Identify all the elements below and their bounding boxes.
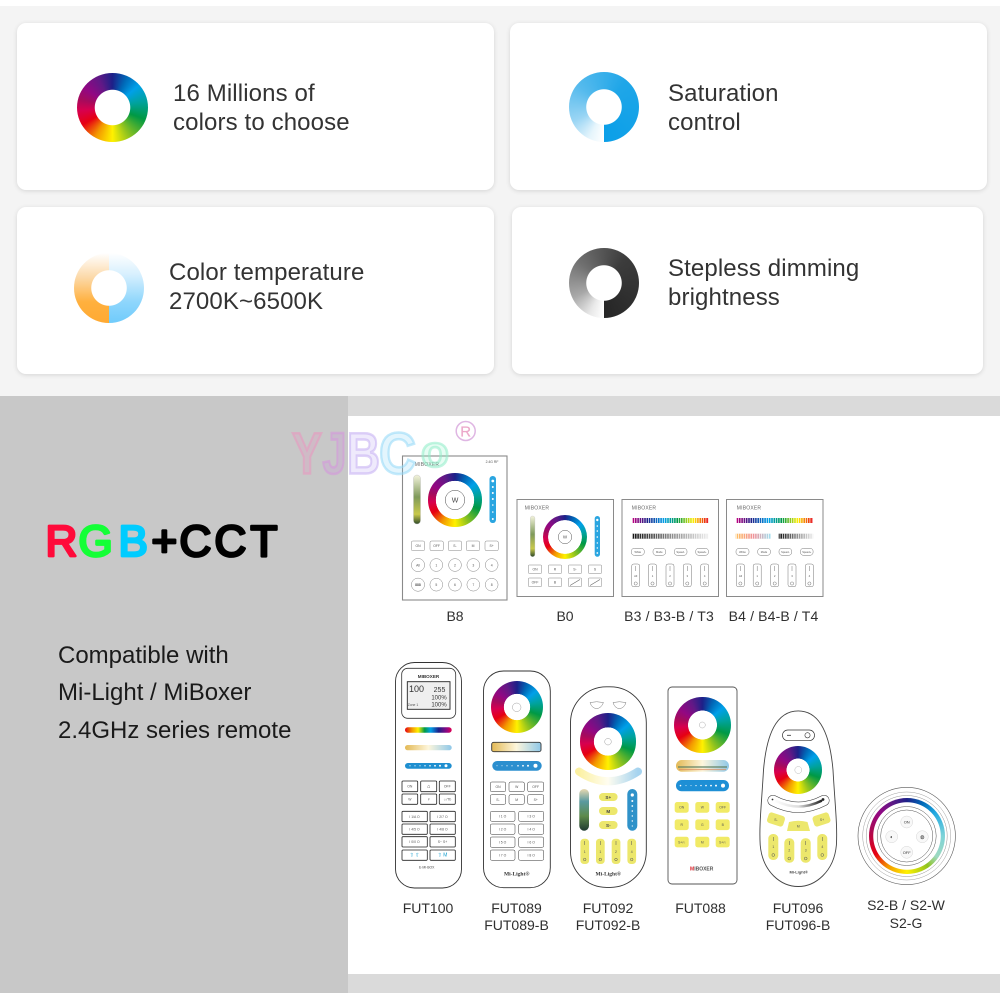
remote: FUT089 xyxy=(484,671,550,888)
remote: S2 round: OFF xyxy=(903,850,911,855)
page background top xyxy=(0,6,1000,396)
panel remote: B0: B xyxy=(554,580,557,584)
panel remote: B4 xyxy=(726,500,823,596)
watermark: YJBCo: Y xyxy=(292,422,322,487)
panel remote: B4: White xyxy=(739,550,746,554)
panel remote: B0: S- xyxy=(573,567,577,571)
remote: FUT089: I 1 O xyxy=(499,814,507,818)
watermark: YJBCo: o xyxy=(421,428,449,476)
panel remote: B0: ON xyxy=(532,567,538,571)
remote: FUT092: 4 xyxy=(631,850,633,854)
remote: FUT100: I 1/A O xyxy=(409,815,420,819)
panel remote: B3 xyxy=(622,500,718,596)
remote: FUT100: E·MI·BOX xyxy=(419,866,435,870)
remote: FUT092: 1 xyxy=(584,850,586,854)
label: wall panel names: B3 / B3-B / T3 xyxy=(624,608,714,624)
panel remote: B4: 3 xyxy=(791,574,793,578)
remote: FUT100: 255 xyxy=(434,687,445,694)
panel: saturation xyxy=(510,23,987,190)
remote: FUT088: W xyxy=(701,806,705,810)
panel remote: B8: S- xyxy=(453,544,457,548)
label: wall panel names xyxy=(446,608,818,624)
remote: FUT089: ON xyxy=(495,785,501,789)
text: color temperature: 2700K~6500K xyxy=(169,288,323,315)
remote: FUT088: S+/○ xyxy=(678,840,685,844)
panel remote: B0 xyxy=(517,500,614,596)
remote: FUT100: 100% xyxy=(431,702,447,708)
panel remote: B8: 3 xyxy=(472,563,474,567)
panel remote: B8: ON xyxy=(415,544,421,548)
remote: FUT088: S+/○ xyxy=(719,840,726,844)
text: compatibility xyxy=(58,642,291,744)
remote: FUT089: I 5 O xyxy=(499,840,507,844)
label: FUT092 xyxy=(576,900,640,933)
panel remote: B8: M xyxy=(472,544,475,548)
remote: FUT089: I 8 O xyxy=(528,853,535,857)
label: wall panel names: B0 xyxy=(556,608,574,624)
label: FUT096 xyxy=(766,900,830,933)
panel remote: B4: MIBOXER xyxy=(737,506,761,512)
panel: right band background xyxy=(348,396,1000,993)
remote: FUT100: MIBOXER xyxy=(418,674,440,679)
remote: S2 round: ◍ xyxy=(920,834,925,840)
remote: FUT089: W xyxy=(515,785,519,789)
remote: FUT088: OFF xyxy=(719,806,726,810)
remote: FUT096: Mi-Light® xyxy=(789,870,808,874)
panel remote: B8: 6 xyxy=(454,583,456,587)
icon: saturation ring xyxy=(569,72,639,142)
label: FUT089: FUT089 xyxy=(491,900,542,916)
label: FUT088: FUT088 xyxy=(675,900,726,916)
remote: FUT100: W xyxy=(408,798,412,802)
text: color temperature: Color temperature xyxy=(169,259,364,286)
panel: models area xyxy=(348,416,1000,974)
remote: FUT100: Zone 1 xyxy=(408,703,418,707)
panel remote: B3: MIBOXER xyxy=(632,506,656,512)
remote: FUT100: ⇧ M xyxy=(438,852,447,858)
watermark: YJBCo: B xyxy=(347,422,380,487)
label: S2: S2-B / S2-W xyxy=(867,897,946,913)
remote: FUT100: S− S+ xyxy=(438,840,447,844)
remote: FUT092: 1 xyxy=(599,850,601,854)
label: FUT089: FUT089-B xyxy=(484,917,549,933)
remote: FUT100: I 2/7 O xyxy=(437,815,448,819)
watermark: YJBCo: C xyxy=(379,422,416,487)
remote: FUT100: ⇧ ⇧ xyxy=(410,852,419,858)
panel remote: B8 xyxy=(402,456,507,600)
icon: CCT ring xyxy=(74,253,144,323)
label: S2 xyxy=(867,897,946,931)
remote: FUT089: Mi-Light® xyxy=(504,870,529,878)
panel remote: B4: 4 xyxy=(809,574,811,578)
panel remote: B8: 1 xyxy=(435,563,437,567)
panel remote: B3: White xyxy=(634,550,642,554)
remote: FUT100: ♀ xyxy=(427,797,431,803)
label: FUT096: FUT096-B xyxy=(766,917,830,933)
panel remote: B0: MIBOXER xyxy=(525,506,549,512)
panel remote: B8: S+ xyxy=(489,544,494,548)
text: dimming xyxy=(668,255,859,311)
panel remote: B3: 3 xyxy=(687,574,689,578)
label: FUT096: FUT096 xyxy=(773,900,823,916)
watermark: YJBCo: J xyxy=(322,422,346,487)
label: FUT100: FUT100 xyxy=(403,900,453,916)
panel remote: B8: 2.4G RF xyxy=(486,460,498,464)
remote: FUT096: M xyxy=(797,824,800,828)
panel remote: B4: Speed- xyxy=(781,550,790,554)
panel remote: B3: 2 xyxy=(669,574,671,578)
remote: FUT089: I 2 O xyxy=(499,827,507,831)
panel remote: B8: 888 xyxy=(415,583,421,587)
remote: FUT100: OFF xyxy=(444,784,451,788)
remote: FUT100: ON xyxy=(407,784,413,788)
remote: FUT100: I 4/5 O xyxy=(409,828,420,832)
remote: FUT089: M xyxy=(515,798,518,802)
panel remote: B8: W xyxy=(452,498,459,504)
panel remote: B4: 2 xyxy=(774,574,776,578)
label: wall panel names: B8 xyxy=(446,608,464,624)
remote: S2 round: ON xyxy=(904,820,910,824)
text: dimming: Stepless dimming xyxy=(668,255,859,282)
remote: FUT089: I 3 O xyxy=(528,814,535,818)
panel remote: B3: 1 xyxy=(652,574,654,578)
text: color temperature xyxy=(169,259,364,315)
text: saturation xyxy=(668,80,779,136)
remote: FUT088: G xyxy=(701,823,704,827)
label: S2: S2-G xyxy=(890,915,922,931)
text: compatibility: 2.4GHz series remote xyxy=(58,717,291,744)
panel: left gray xyxy=(0,396,348,993)
remote: FUT092: Mi-Light® xyxy=(596,870,621,878)
text: compatibility: Mi-Light / MiBoxer xyxy=(58,679,251,706)
remote: FUT100: ⌂ xyxy=(427,784,430,790)
remote: FUT088: MIBOXER xyxy=(690,866,714,872)
panel remote: B8: OFF xyxy=(433,544,440,548)
panel remote: B8: 4 xyxy=(491,563,493,567)
remote: FUT100: ☼/Tb xyxy=(443,798,451,802)
remote: FUT092: S- xyxy=(606,823,611,828)
panel remote: B4: Mode xyxy=(761,550,768,554)
text: dimming: brightness xyxy=(668,284,780,311)
remote: FUT089: I 6 O xyxy=(528,840,535,844)
remote: FUT088: R xyxy=(680,823,683,827)
panel remote: B8: 5 xyxy=(435,583,437,587)
remote: FUT096 xyxy=(760,711,837,886)
remote: FUT100: I 4/8 O xyxy=(437,828,448,832)
text: colors: colors to choose xyxy=(173,109,350,136)
label: FUT092: FUT092-B xyxy=(576,917,640,933)
remote: FUT100 xyxy=(396,662,462,888)
title: RGB+CCT xyxy=(46,517,277,566)
panel remote: B4: 1 xyxy=(756,574,758,578)
remote: FUT088 xyxy=(668,687,737,884)
panel remote: B0: R xyxy=(554,567,557,571)
remote: FUT096: S+ xyxy=(820,818,824,822)
text: compatibility: Compatible with xyxy=(58,642,229,669)
remote: FUT088: M xyxy=(701,840,704,844)
remote: FUT100: I 0/0 O xyxy=(409,840,420,844)
remote: FUT088: ON xyxy=(679,806,685,810)
remote: FUT096: 3 xyxy=(805,848,807,852)
panel remote: B8: All xyxy=(416,563,420,567)
remote: FUT088: B xyxy=(722,823,725,827)
panel remote: B3: All xyxy=(634,574,638,578)
panel remote: B3: 4 xyxy=(704,574,706,578)
remote: FUT092: S+ xyxy=(605,795,611,800)
panel remote: B4: All xyxy=(739,574,742,578)
remote: FUT092 xyxy=(570,687,646,887)
panel remote: B0: W xyxy=(563,534,568,540)
remote: FUT092: M xyxy=(606,809,610,814)
panel remote: B3: Speed- xyxy=(676,550,685,554)
remote: FUT089: S+ xyxy=(534,798,538,802)
remote: FUT096: 4 xyxy=(821,845,823,849)
icon: dimming ring xyxy=(569,248,639,318)
panel: 16 millions of colors xyxy=(17,23,494,190)
label: FUT092: FUT092 xyxy=(583,900,633,916)
label: FUT089 xyxy=(484,900,549,933)
text: colors xyxy=(173,80,350,136)
text: colors: 16 Millions of xyxy=(173,80,315,107)
panel remote: B4: Speed+ xyxy=(802,550,812,554)
watermark: YJBCo: R xyxy=(460,424,471,440)
text: saturation: control xyxy=(668,109,741,136)
panel remote: B3: Mode xyxy=(656,550,663,554)
remote: FUT089: S- xyxy=(496,798,500,802)
panel remote: B8: 8 xyxy=(491,583,493,587)
watermark: YJBCo xyxy=(292,422,475,487)
remote: FUT089: I 7 O xyxy=(499,853,507,857)
remote: FUT089: I 4 O xyxy=(528,827,535,831)
remote: S2 round xyxy=(858,787,955,885)
panel: color temperature xyxy=(17,207,494,374)
panel: dimming xyxy=(512,207,983,374)
text: saturation: Saturation xyxy=(668,80,779,107)
panel remote: B3: Speed+ xyxy=(697,550,707,554)
panel remote: B0: S xyxy=(594,567,597,571)
remote: S2 round: ◐ xyxy=(890,834,893,840)
remote: FUT096: 2 xyxy=(788,848,790,852)
panel remote: B8: 7 xyxy=(472,583,474,587)
remote: FUT089: OFF xyxy=(532,785,539,789)
remote: FUT100: 100 xyxy=(409,684,424,694)
label: wall panel names: B4 / B4-B / T4 xyxy=(729,608,818,624)
remote: FUT096: 1 xyxy=(772,845,774,849)
remote: FUT092: 2 xyxy=(615,850,617,854)
remote: FUT096: S- xyxy=(774,818,778,822)
remote: FUT100: 100% xyxy=(431,696,447,702)
panel remote: B8: MIBOXER xyxy=(415,462,439,468)
panel remote: B8: 2 xyxy=(454,563,456,567)
panel remote: B0: OFF xyxy=(532,580,538,584)
icon: color wheel xyxy=(77,73,148,142)
